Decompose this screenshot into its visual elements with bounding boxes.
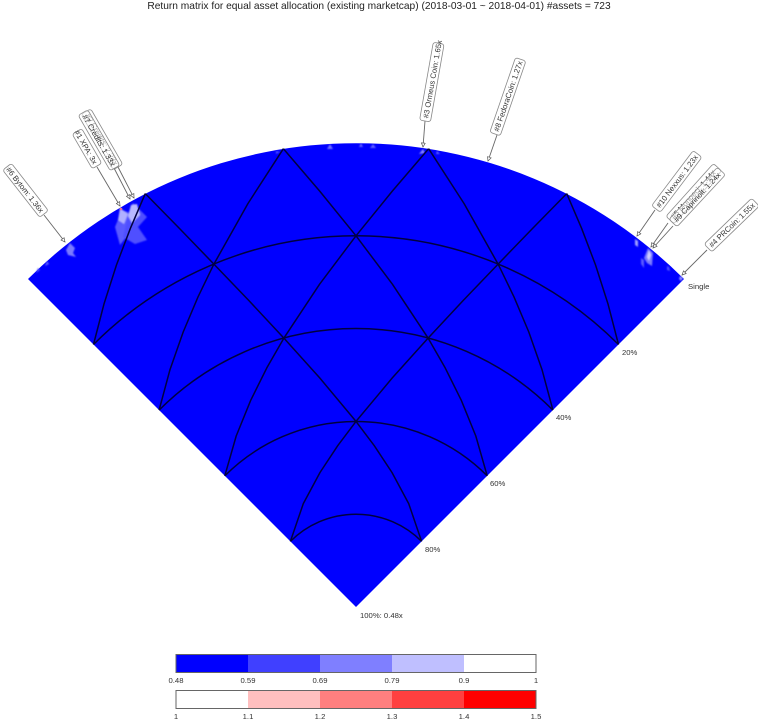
legend: gain scale: 1.3 <box>387 712 397 721</box>
callout: #2 hidden label <box>81 109 134 198</box>
legend: loss scale: 0.48 <box>169 676 183 685</box>
legend: gain scale: 1 <box>174 712 178 721</box>
legend: gain scale <box>174 690 541 721</box>
callout: #3 Ormeus Coin <box>420 39 445 147</box>
grid: curved diagonals <box>94 149 618 541</box>
callout: #3 Ormeus Coin: #3 Ormeus Coin: 1.65x <box>421 39 444 119</box>
callout: #1 XPA <box>72 128 120 206</box>
grid: rings <box>94 236 618 541</box>
legend: gain scale: 1.5 <box>531 712 541 721</box>
callout: #7 Credits <box>78 110 130 199</box>
callout: #9 Caprinolt <box>653 167 725 248</box>
callout: #4 PRCoin <box>682 198 758 275</box>
callout: #8 FedoraCoin <box>488 58 526 161</box>
legend: loss scale: 0.59 <box>241 676 255 685</box>
axis label: 40%: 40% <box>556 413 572 422</box>
callout: #5 hidden label <box>651 164 722 247</box>
axis label: 100%: 100%: 0.48x <box>360 611 403 620</box>
axis label: 80%: 80% <box>425 545 441 554</box>
callout: #5 hidden label: #5 Monoeci: 1.44x <box>669 168 718 221</box>
callout: #4 PRCoin: #4 PRCoin: 1.55x <box>707 201 757 249</box>
callout: #9 Caprinolt: #9 Caprinolt: 1.24x <box>672 171 723 224</box>
title: Return matrix for equal asset allocation (existing marketcap) (2018-03-01 ~ 2018-04-01) #assets = 723 <box>147 1 611 12</box>
legend: loss scale: 0.69 <box>313 676 327 685</box>
legend: gain scale: 1.4 <box>459 712 470 721</box>
callout: #10 Nexxus <box>637 151 702 236</box>
axis label: Single: Single <box>688 282 709 291</box>
callout: #8 FedoraCoin: #8 FedoraCoin: 1.27x <box>492 60 525 133</box>
red peak of XPA <box>120 208 122 210</box>
light return patches <box>36 143 683 281</box>
axis label: 60%: 60% <box>490 479 506 488</box>
legend: loss scale: 0.79 <box>385 676 399 685</box>
legend: loss scale: 0.9 <box>459 676 469 685</box>
callout: #1 XPA: #1 XPA: 3x <box>72 128 99 166</box>
sector chart: return matrix <box>28 143 684 607</box>
legend: gain scale: 1.2 <box>315 712 325 721</box>
axis label: 20%: 20% <box>622 348 638 357</box>
callout: #6 Bytom: #6 Bytom: 1.36x <box>4 165 46 215</box>
callout: #6 Bytom <box>3 163 65 242</box>
blue sector fill <box>28 143 684 607</box>
legend: loss scale <box>169 654 538 685</box>
legend: gain scale: 1.1 <box>243 712 253 721</box>
callout: #7 Credits: #7 Credits: 1.33x <box>80 113 117 168</box>
callout: #2 hidden label: #2 Credits: 2.23x <box>83 112 120 167</box>
legend: loss scale: 1 <box>534 676 538 685</box>
callout: #10 Nexxus: #10 Nexxus: 1.23x <box>654 153 700 209</box>
